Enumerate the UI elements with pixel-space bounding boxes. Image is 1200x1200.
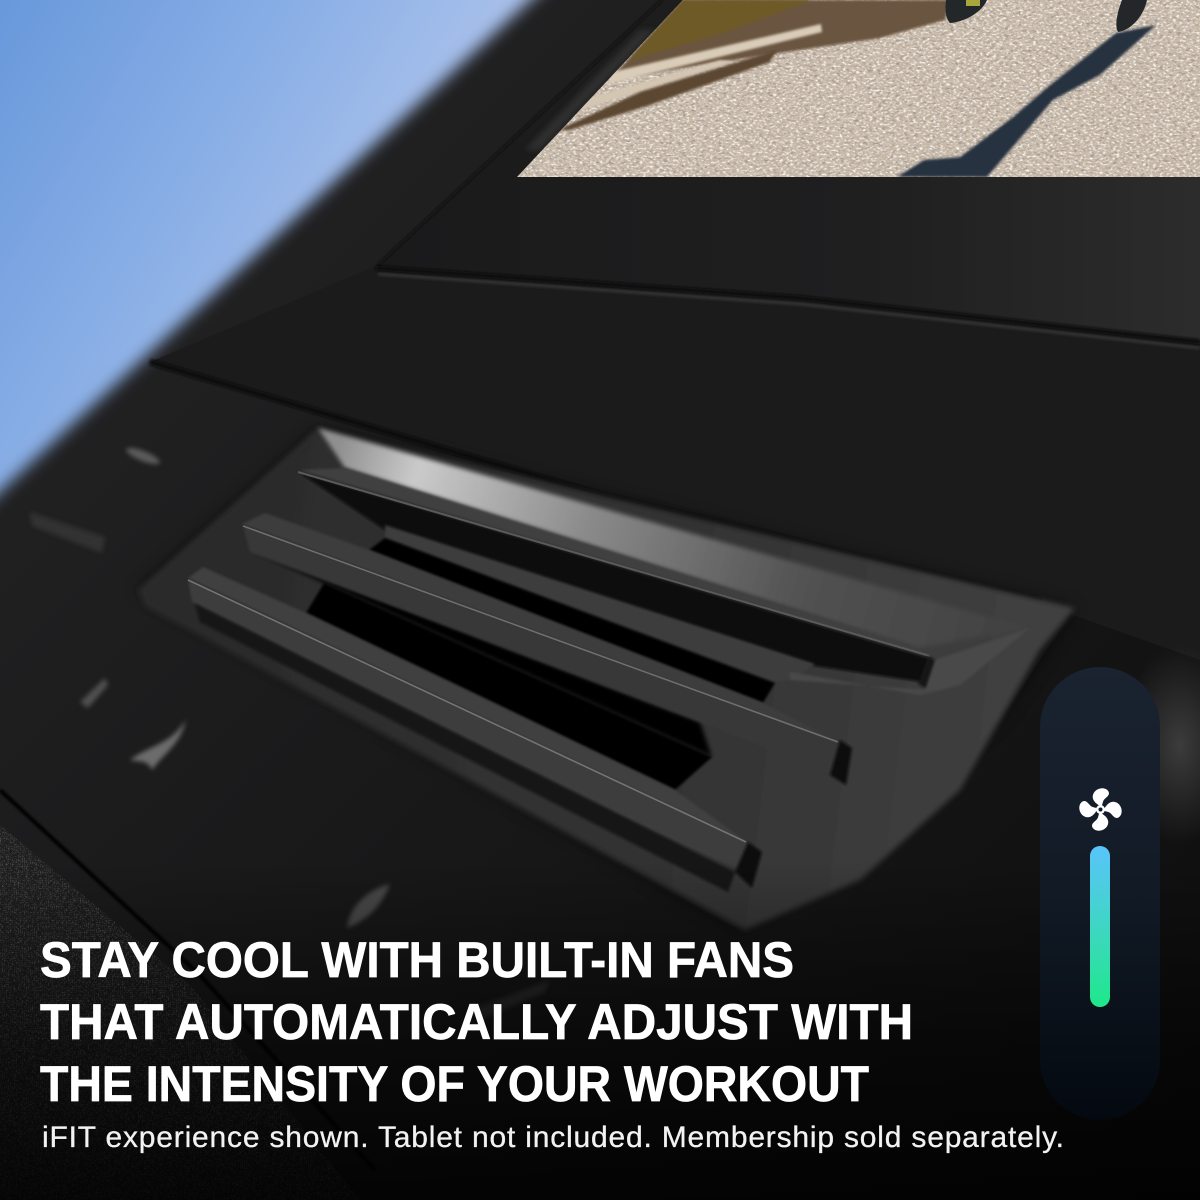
pale trail stripe upper xyxy=(608,24,822,84)
fan vent assembly xyxy=(138,428,1075,930)
pill background xyxy=(1040,667,1160,1120)
console upper band below tablet xyxy=(150,265,1200,660)
tablet bezel xyxy=(378,0,1200,340)
pale trail stripe lower xyxy=(575,60,735,112)
faded console label xyxy=(30,512,105,553)
fan level indicator xyxy=(1040,667,1160,1120)
second bar shadow end xyxy=(830,740,852,785)
black air slot upper xyxy=(369,538,775,703)
runner shoes xyxy=(945,0,1147,32)
second bar highlight xyxy=(243,526,838,742)
icon: small button mark xyxy=(124,445,162,467)
icon: small fan mark xyxy=(80,678,108,708)
headline xyxy=(40,932,913,1112)
second bar upper band xyxy=(242,513,838,742)
third bar highlight xyxy=(188,580,746,842)
vent shadow well xyxy=(138,428,1075,930)
console seam line xyxy=(150,362,1040,600)
lower console edge xyxy=(0,790,375,1170)
tablet ledge line xyxy=(376,268,1200,342)
speaker grille xyxy=(0,825,360,1200)
dark channel under first bar xyxy=(300,473,930,682)
black air slot lower xyxy=(306,583,712,790)
headline line 3: THE INTENSITY OF YOUR WORKOUT xyxy=(40,1056,869,1112)
headline line 2: THAT AUTOMATICALLY ADJUST WITH xyxy=(40,994,913,1050)
right interior panel highlight xyxy=(790,628,1030,695)
icon: fan xyxy=(1079,788,1122,831)
dark shadow under second bar xyxy=(250,550,712,757)
bezel side stripe xyxy=(525,30,655,150)
tablet screen: trail photo xyxy=(510,0,1200,178)
first bar highlight xyxy=(298,472,930,656)
bottom dark gradient xyxy=(0,860,1200,1200)
background: blue sky xyxy=(0,0,552,510)
fan speed bar xyxy=(1090,846,1110,1007)
headline line 1: STAY COOL WITH BUILT-IN FANS xyxy=(40,932,794,988)
dirt rut xyxy=(558,50,777,130)
dirt area xyxy=(612,0,950,77)
upper gray lip xyxy=(300,468,930,657)
third bar upper band xyxy=(188,567,748,843)
blurred console icons xyxy=(30,445,550,1020)
right side glow xyxy=(1120,645,1200,845)
icon: leaf mark xyxy=(347,884,390,928)
vent housing xyxy=(138,428,1075,930)
dry grass patch xyxy=(629,0,812,60)
runner shadow xyxy=(897,25,1156,177)
disclaimer: iFIT experience shown. Tablet not included. Membership sold separately. xyxy=(42,1121,1064,1154)
third bar shadow end xyxy=(735,842,762,888)
bezel outer edge xyxy=(378,0,662,265)
icon: large fan mark xyxy=(130,720,186,770)
tablet ledge highlight xyxy=(378,274,1200,348)
third bar lower face xyxy=(188,580,748,870)
third bar lower channel xyxy=(195,604,735,892)
gray strip between channel and slot xyxy=(385,525,815,682)
silver top fin xyxy=(318,428,1027,648)
first bar end cap xyxy=(918,656,938,690)
lower console button xyxy=(470,980,550,1020)
sand ground xyxy=(510,0,1200,178)
second bar lower face xyxy=(243,526,838,775)
